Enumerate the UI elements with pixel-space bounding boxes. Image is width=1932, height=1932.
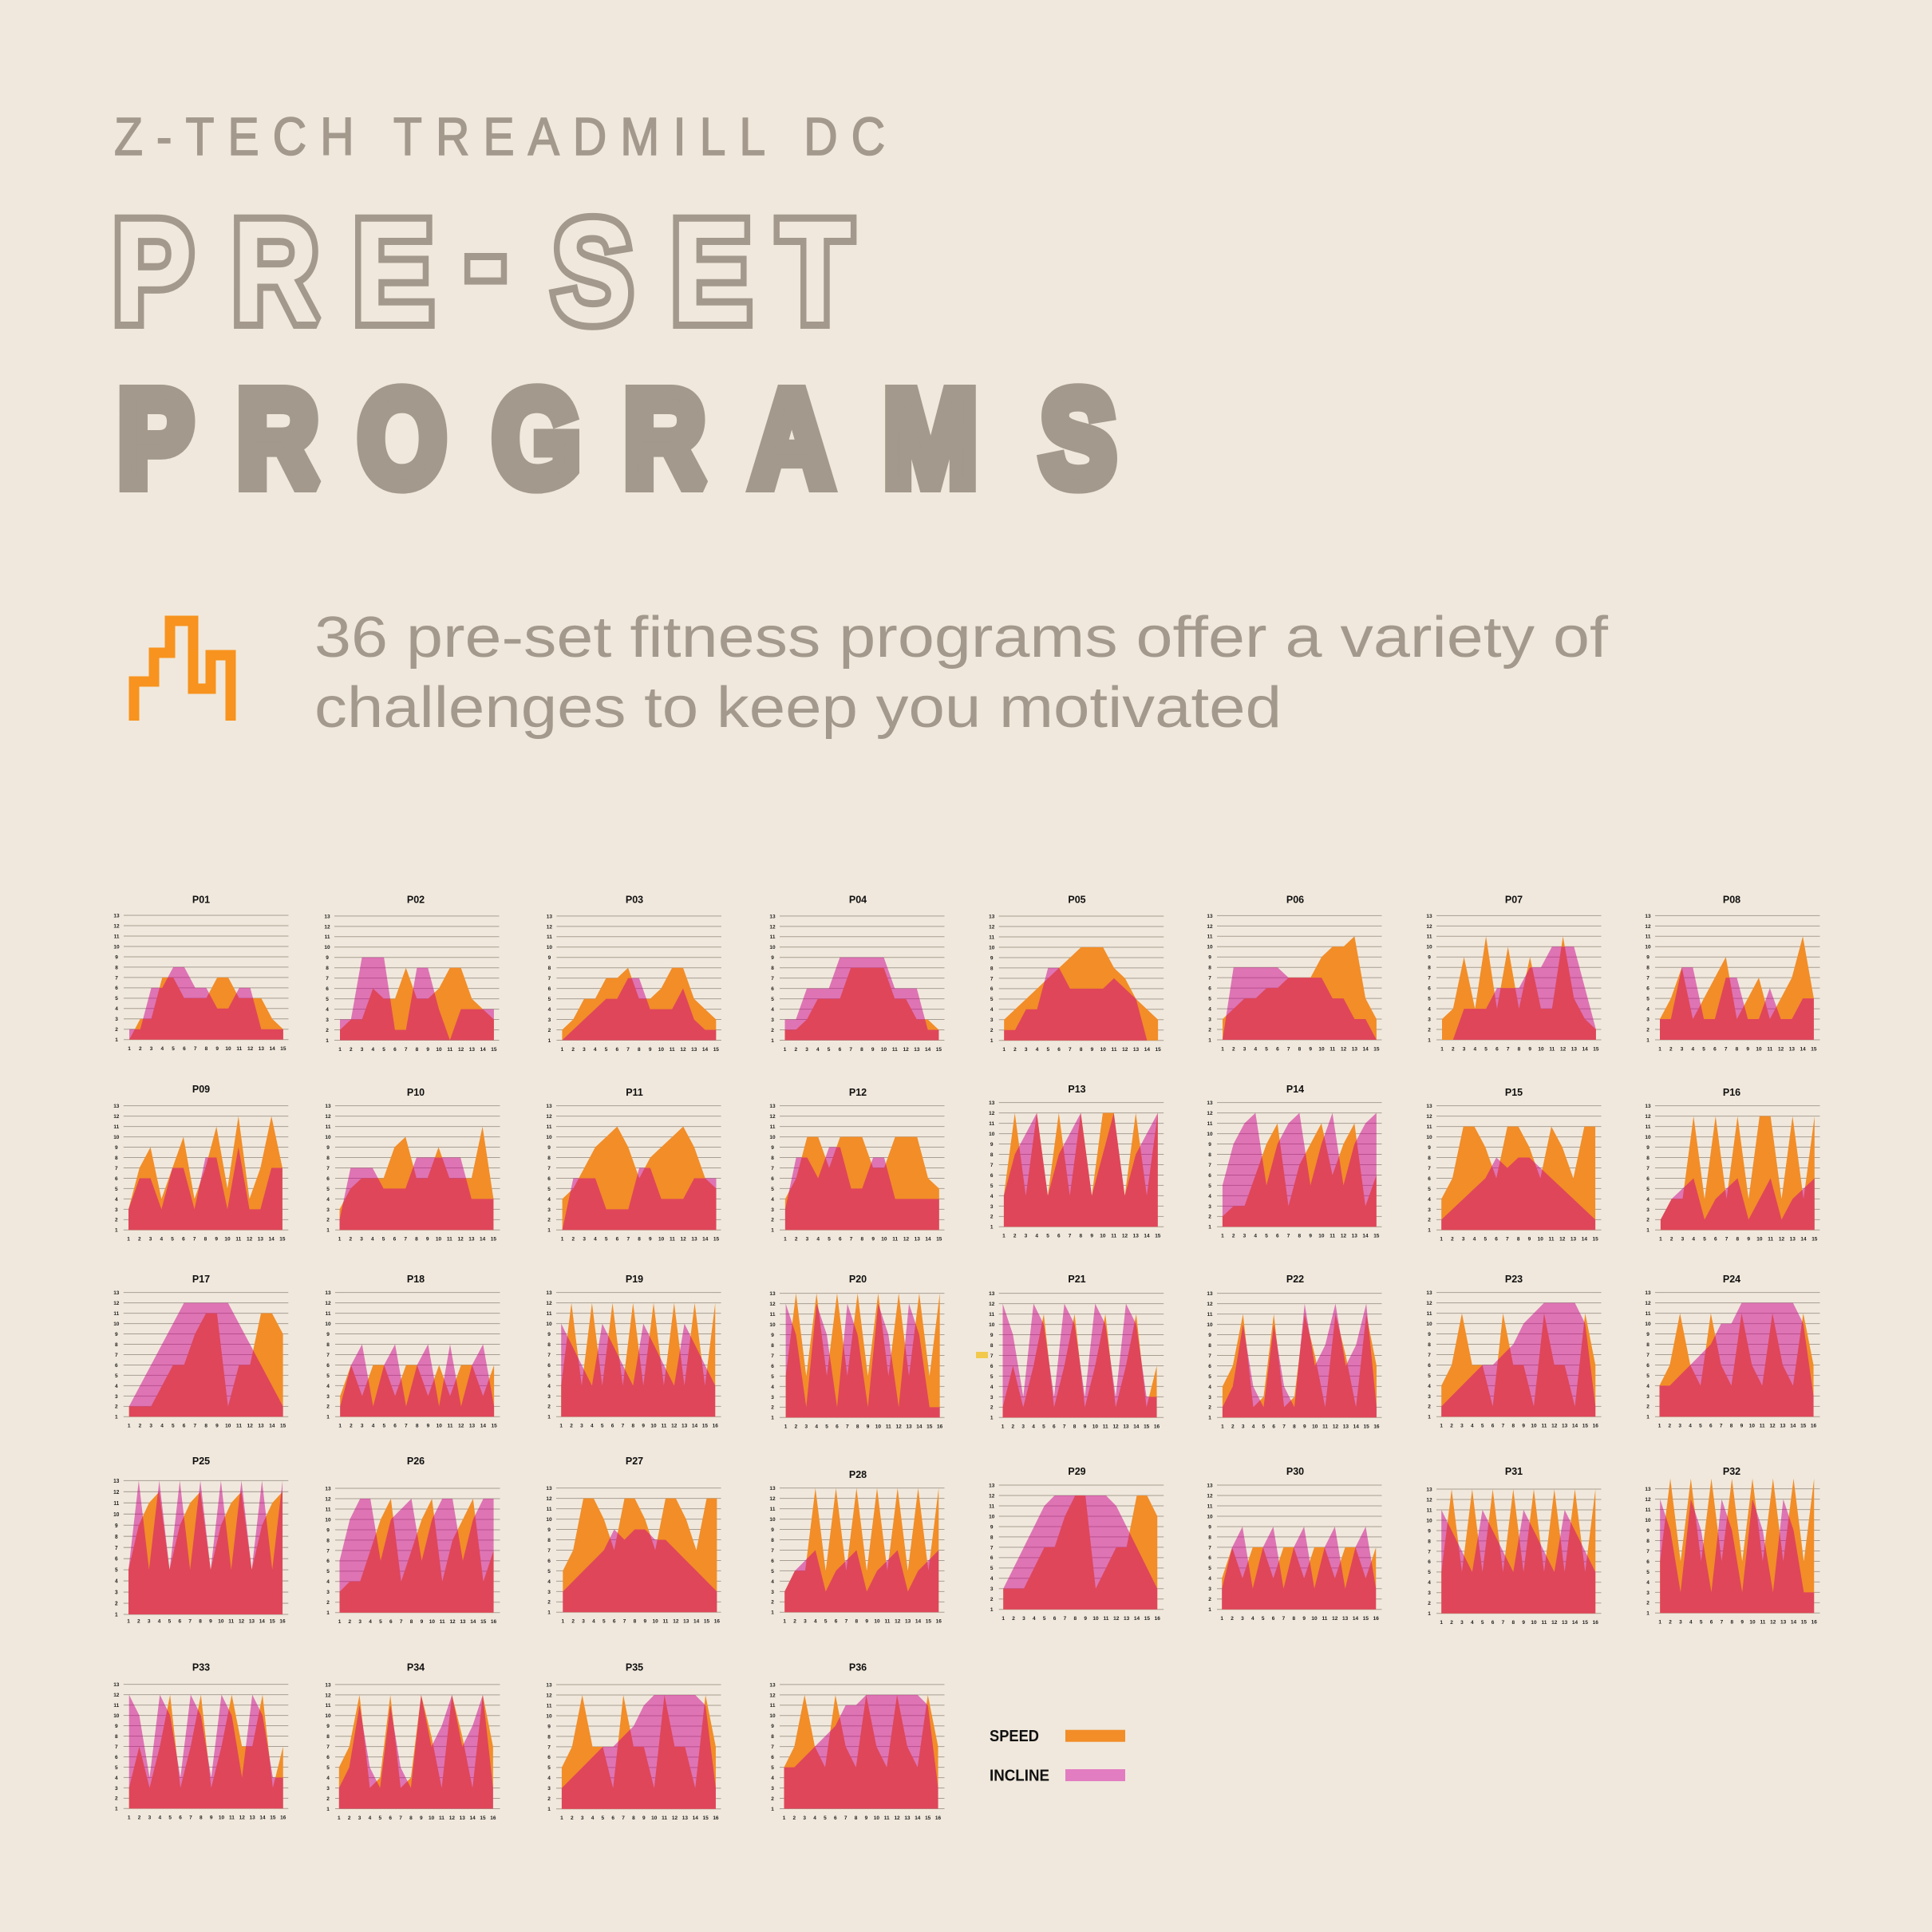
chart: P19: 3: [580, 1424, 583, 1429]
P22 incline: [1223, 1304, 1377, 1417]
P01 title: P01: [192, 894, 210, 905]
chart: P01: 6: [115, 986, 118, 991]
P20 speed: [786, 1294, 940, 1417]
P06 title: P06: [1286, 894, 1304, 905]
chart: P19: 4: [591, 1424, 594, 1429]
P19 title: P19: [626, 1274, 643, 1285]
P19 speed: [561, 1303, 715, 1416]
chart: P31: [1426, 1466, 1601, 1626]
chart: P01: 15: [280, 1046, 286, 1052]
P19 incline: [561, 1324, 715, 1416]
chart: P01: 12: [113, 923, 120, 929]
chart: P19: 6: [611, 1424, 614, 1429]
P09 incline: [128, 1148, 282, 1230]
legend swatch: incline: [1065, 1769, 1125, 1781]
P26 incline: [340, 1499, 494, 1613]
chart: P02: [324, 894, 500, 1053]
chart: P01: [113, 894, 289, 1052]
P22 title: P22: [1286, 1274, 1304, 1285]
P34 incline: [339, 1695, 493, 1808]
heading: Programs solid: PROGRAMS: [118, 364, 1116, 515]
chart: P23: [1426, 1274, 1601, 1429]
P04 areas: [785, 958, 938, 1041]
P20 title: P20: [849, 1274, 867, 1285]
P17 title: P17: [192, 1274, 210, 1285]
P21 incline: [1002, 1304, 1157, 1417]
P34 speed: [339, 1695, 493, 1808]
chart: P12: [769, 1087, 945, 1243]
chart: P01: 4: [161, 1046, 164, 1052]
chart: P14: [1207, 1084, 1382, 1239]
P30 title: P30: [1286, 1466, 1304, 1477]
P14 areas: [1223, 1113, 1377, 1227]
P03 speed: [562, 968, 716, 1041]
P21 areas: [1002, 1304, 1157, 1417]
P11 title: P11: [626, 1087, 643, 1098]
chart: P01: 5: [172, 1046, 175, 1052]
P10 speed: [340, 1127, 493, 1230]
heading: Pre-Set outlined: PRE-SET: [113, 176, 852, 353]
P31 title: P31: [1505, 1466, 1523, 1477]
P14 incline: [1223, 1113, 1377, 1227]
P30 speed: [1222, 1547, 1376, 1610]
chart: P11: [546, 1087, 721, 1243]
chart: P19: 5: [601, 1424, 604, 1429]
chart: P10: [325, 1087, 500, 1243]
chart: P01: 11: [236, 1046, 243, 1052]
chart: P25: [113, 1456, 288, 1624]
P21 speed: [1002, 1314, 1157, 1417]
chart: P18: [325, 1274, 500, 1429]
P13 areas: [1004, 1113, 1158, 1227]
P01 incline: [129, 967, 283, 1040]
P12 speed: [785, 1137, 939, 1230]
P01 areas: [129, 967, 283, 1040]
P10 title: P10: [407, 1087, 425, 1098]
small yellow marker: [976, 1352, 988, 1358]
P34 title: P34: [407, 1661, 425, 1673]
chart: P01: 3: [115, 1017, 118, 1022]
P25 speed: [128, 1491, 282, 1614]
P15 title: P15: [1505, 1087, 1523, 1098]
chart: P01: 8: [205, 1046, 208, 1052]
P34 areas: [339, 1695, 493, 1808]
P33 areas: [129, 1695, 283, 1808]
P11 areas: [563, 1127, 717, 1230]
P17 areas: [129, 1303, 283, 1416]
P24 incline: [1660, 1303, 1814, 1416]
chart: P33: [113, 1661, 288, 1821]
P24 title: P24: [1723, 1274, 1740, 1285]
P06 areas: [1223, 936, 1377, 1040]
P26 title: P26: [407, 1456, 425, 1467]
legend: [990, 1728, 1125, 1785]
chart: P19: 11: [661, 1424, 667, 1429]
P05 incline: [1004, 968, 1158, 1041]
P11 incline: [563, 1167, 717, 1230]
chart: P19: 2: [570, 1424, 573, 1429]
P15 areas: [1441, 1127, 1595, 1230]
chart: P01: 4: [115, 1006, 118, 1012]
P20 areas: [786, 1294, 940, 1417]
P29 speed: [1003, 1495, 1157, 1610]
P17 incline: [129, 1303, 283, 1416]
P02 areas: [340, 958, 494, 1041]
P02 incline: [340, 958, 494, 1041]
P04 incline: [785, 958, 938, 1041]
chart: P01: 1: [115, 1037, 118, 1043]
chart: P01: 14: [270, 1046, 275, 1052]
legend label: incline: INCLINE: [990, 1768, 1049, 1785]
P27 title: P27: [626, 1456, 643, 1467]
P13 title: P13: [1068, 1084, 1086, 1095]
P04 title: P04: [849, 894, 867, 905]
P35 title: P35: [626, 1661, 643, 1673]
chart: P08: [1645, 894, 1819, 1052]
chart: P19: 8: [631, 1424, 634, 1429]
P36 areas: [784, 1695, 938, 1808]
P10 areas: [340, 1127, 493, 1230]
chart: P01: 12: [247, 1046, 254, 1052]
P29 incline: [1003, 1495, 1157, 1610]
chart: P29: [989, 1466, 1164, 1622]
chart: P17: [113, 1274, 288, 1429]
chart: P22: [1207, 1274, 1382, 1430]
P21 title: P21: [1068, 1274, 1086, 1285]
chart: P19: 16: [713, 1424, 718, 1429]
P10 incline: [340, 1158, 493, 1230]
P03 title: P03: [626, 894, 643, 905]
chart: P19: 1: [559, 1424, 563, 1429]
P35 incline: [562, 1695, 716, 1809]
chart: P32: [1645, 1466, 1819, 1626]
chart: P16: [1645, 1087, 1819, 1243]
P36 speed: [784, 1695, 938, 1808]
P33 title: P33: [192, 1662, 210, 1673]
P29 title: P29: [1068, 1466, 1086, 1477]
P04 speed: [785, 968, 938, 1041]
text block: description: [314, 606, 1609, 740]
chart: P27: [546, 1456, 721, 1625]
chart: P01: 9: [215, 1046, 219, 1052]
chart: P01: 11: [114, 934, 120, 939]
P23 incline: [1441, 1303, 1595, 1416]
P16 areas: [1661, 1116, 1815, 1230]
P08 incline: [1660, 967, 1814, 1040]
legend swatch: speed: [1065, 1730, 1125, 1742]
icon: stepped program profile: [134, 621, 231, 721]
P09 title: P09: [192, 1084, 210, 1095]
P15 speed: [1441, 1127, 1595, 1230]
P18 incline: [340, 1345, 494, 1416]
chart: P19: 10: [650, 1424, 657, 1429]
P06 incline: [1223, 967, 1377, 1040]
chart: P01: 10: [113, 944, 120, 950]
P09 areas: [128, 1116, 282, 1230]
chart: P24: [1645, 1274, 1819, 1429]
text block: description: challenges to keep you motivated: [314, 676, 1282, 740]
P12 title: P12: [849, 1087, 867, 1098]
P31 speed: [1441, 1489, 1595, 1614]
chart: P13: [989, 1084, 1164, 1239]
P28 speed: [784, 1488, 938, 1612]
P05 title: P05: [1068, 894, 1086, 905]
chart: P19: 9: [642, 1424, 645, 1429]
P25 incline: [128, 1480, 282, 1614]
P22 areas: [1223, 1304, 1377, 1417]
P28 incline: [784, 1550, 938, 1612]
P36 title: P36: [849, 1661, 867, 1673]
P07 areas: [1442, 936, 1596, 1040]
chart: P34: [325, 1661, 500, 1821]
P09 speed: [128, 1116, 282, 1230]
P32 speed: [1660, 1479, 1814, 1613]
chart: P01: 7: [194, 1046, 197, 1052]
P27 speed: [563, 1499, 717, 1612]
P16 title: P16: [1723, 1087, 1740, 1098]
P11 speed: [563, 1127, 717, 1230]
legend label: speed: SPEED: [990, 1728, 1039, 1745]
P27 areas: [563, 1499, 717, 1612]
P06 speed: [1223, 936, 1377, 1040]
P12 incline: [785, 1148, 939, 1230]
P23 title: P23: [1505, 1274, 1523, 1285]
P25 title: P25: [192, 1456, 210, 1467]
P23 areas: [1441, 1303, 1595, 1416]
P03 incline: [562, 978, 716, 1041]
P07 speed: [1442, 936, 1596, 1040]
P32 areas: [1660, 1479, 1814, 1613]
P20 incline: [786, 1304, 940, 1417]
chart: P19: 15: [702, 1424, 708, 1429]
P07 incline: [1442, 946, 1596, 1040]
chart: P01: 7: [115, 975, 118, 981]
P19 areas: [561, 1303, 715, 1416]
chart: P19: 14: [692, 1424, 698, 1429]
P28 title: P28: [849, 1469, 867, 1480]
chart: P01: 10: [225, 1046, 231, 1052]
chart: P01: 1: [128, 1046, 131, 1052]
P18 title: P18: [407, 1274, 425, 1285]
P26 speed: [340, 1499, 494, 1613]
P31 areas: [1441, 1489, 1595, 1614]
chart: P07: [1426, 894, 1601, 1052]
chart: P20: [769, 1274, 945, 1430]
chart: P19: [546, 1274, 721, 1429]
P36 incline: [784, 1695, 938, 1808]
chart: P03: [547, 894, 721, 1053]
chart: P01: 6: [183, 1046, 186, 1052]
chart: P35: [546, 1661, 721, 1821]
chart: P01: 5: [115, 996, 118, 1002]
P29 areas: [1003, 1495, 1157, 1610]
P18 speed: [340, 1365, 494, 1416]
chart: P01: 2: [139, 1046, 142, 1052]
chart: P01: 9: [115, 954, 118, 960]
chart: P01: 13: [113, 913, 120, 919]
P35 speed: [562, 1695, 716, 1809]
P05 areas: [1004, 947, 1158, 1041]
P02 speed: [340, 968, 494, 1041]
chart: P19: 7: [622, 1424, 625, 1429]
P18 areas: [340, 1345, 494, 1416]
P05 speed: [1004, 947, 1158, 1041]
chart: P01: 2: [115, 1027, 118, 1033]
P08 areas: [1660, 936, 1814, 1040]
chart: P30: [1207, 1466, 1382, 1622]
chart: P05: [989, 894, 1164, 1053]
P17 speed: [129, 1314, 283, 1416]
P32 incline: [1660, 1499, 1814, 1613]
P26 areas: [340, 1499, 494, 1613]
P33 speed: [129, 1695, 283, 1808]
chart: P04: [769, 894, 945, 1053]
P13 speed: [1004, 1113, 1158, 1227]
P32 title: P32: [1723, 1466, 1740, 1477]
P02 title: P02: [407, 894, 425, 905]
P35 areas: [562, 1695, 716, 1809]
P15 incline: [1441, 1158, 1595, 1230]
P03 areas: [562, 968, 716, 1041]
P24 areas: [1660, 1303, 1814, 1416]
P23 speed: [1441, 1314, 1595, 1416]
P27 incline: [563, 1530, 717, 1612]
P01 speed: [129, 978, 283, 1040]
P08 speed: [1660, 936, 1814, 1040]
text block: description: 36 pre-set fitness programs offer a variety of: [314, 606, 1609, 670]
chart: P19: 12: [671, 1424, 678, 1429]
chart: P21: [989, 1274, 1164, 1430]
chart: P01: 8: [115, 965, 118, 970]
P28 areas: [784, 1488, 938, 1612]
chart: P26: [325, 1456, 500, 1625]
P14 speed: [1223, 1124, 1377, 1227]
chart: P19: 13: [682, 1424, 688, 1429]
P31 incline: [1441, 1510, 1595, 1614]
P22 speed: [1223, 1314, 1377, 1417]
P33 incline: [129, 1695, 283, 1808]
chart: P28: [769, 1469, 945, 1625]
P14 title: P14: [1286, 1084, 1304, 1095]
P12 areas: [785, 1137, 939, 1230]
chart: P01: 13: [259, 1046, 264, 1052]
P16 speed: [1661, 1116, 1815, 1230]
chart: P01: 3: [150, 1046, 153, 1052]
chart: P36: [769, 1661, 945, 1821]
P13 incline: [1004, 1113, 1158, 1227]
P08 title: P08: [1723, 894, 1740, 905]
P25 areas: [128, 1480, 282, 1614]
P07 title: P07: [1505, 894, 1523, 905]
chart: P15: [1426, 1087, 1601, 1243]
P16 incline: [1661, 1178, 1815, 1230]
P30 areas: [1222, 1527, 1376, 1610]
heading: Z-Tech Treadmill DC: Z-TECH TREADMILL DC: [114, 108, 885, 167]
P24 speed: [1660, 1314, 1814, 1416]
chart: P06: [1207, 894, 1382, 1052]
chart: P09: [113, 1084, 288, 1243]
P30 incline: [1222, 1527, 1376, 1610]
